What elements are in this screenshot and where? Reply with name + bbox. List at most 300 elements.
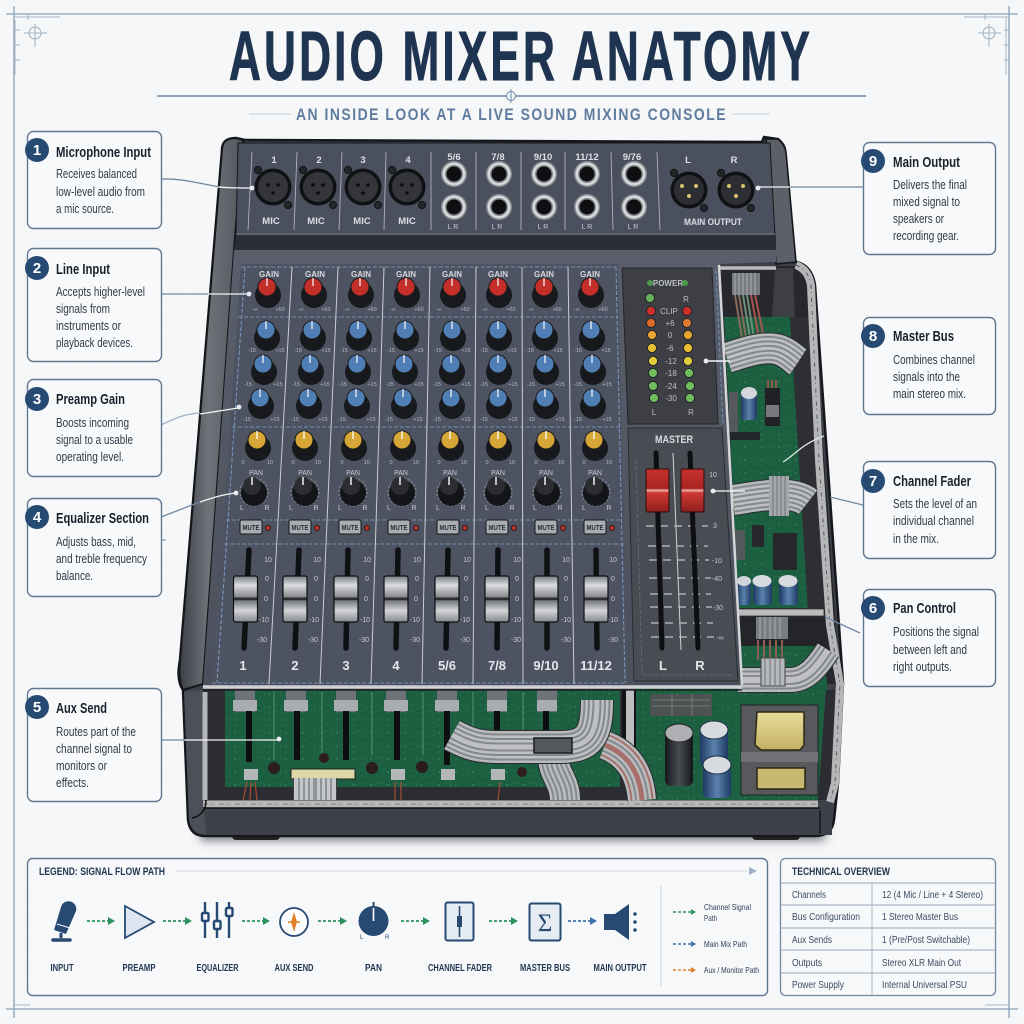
eq knobs: -15: [527, 417, 535, 423]
eq knobs: +15: [273, 382, 283, 388]
level meter panel: POWER: [653, 279, 683, 288]
callout 6: pan control: [861, 590, 996, 686]
level meter panel: -18: [665, 369, 677, 378]
pan knobs: L: [582, 505, 586, 512]
level meter panel: -30: [665, 394, 677, 403]
channel faders: 10: [313, 557, 321, 564]
aux knobs: 10: [606, 460, 612, 466]
eq knobs: +15: [366, 417, 376, 423]
gain row: GAIN: [305, 270, 325, 279]
channel faders: -10: [410, 617, 420, 624]
eq knobs: +15: [318, 417, 328, 423]
eq knobs: -15: [574, 417, 582, 423]
pan knobs: L: [289, 505, 293, 512]
channel faders: 10: [609, 557, 617, 564]
callout 2: line input: Accepts higher-level: [56, 285, 145, 299]
channel faders: -30: [511, 637, 521, 644]
aux knobs: 10: [558, 460, 564, 466]
callout 1: microphone input: Receives balanced: [56, 167, 137, 181]
channel faders: -30: [561, 637, 571, 644]
eq knobs: +15: [413, 417, 423, 423]
channel faders: 7/8: [488, 658, 506, 673]
eq knobs: +15: [601, 348, 611, 354]
pan knobs: R: [313, 505, 319, 512]
gain row: -∞: [390, 307, 396, 313]
panel: technical overview: Aux Sends: [792, 934, 832, 946]
flow stage labels: EQUALIZER: [196, 962, 239, 974]
pan knobs: R: [264, 505, 270, 512]
icon: master bus sigma: Σ: [538, 910, 552, 937]
pan knobs: R: [606, 505, 612, 512]
open case: lower bay: [184, 688, 835, 835]
callout 6: pan control: Positions the signal: [893, 625, 979, 639]
channel faders: 0: [464, 576, 468, 583]
lower faders and sliders on board: [233, 690, 560, 800]
callout 7: channel fader: Sets the level of an: [893, 497, 977, 511]
rear connector panel: MAIN OUTPUT: [684, 217, 742, 228]
flow stage labels: MAIN OUTPUT: [594, 962, 647, 974]
panel: technical overview: [780, 858, 996, 996]
eq knobs: +15: [602, 417, 612, 423]
channel faders: -30: [359, 637, 369, 644]
callout 9: main output: Delivers the final: [893, 178, 967, 192]
channel faders: -30: [410, 637, 420, 644]
eq knobs: -15: [433, 382, 441, 388]
channel faders: 0: [515, 576, 519, 583]
gain row: -∞: [528, 307, 534, 313]
channel faders: 0: [265, 576, 269, 583]
aux knobs: 10: [364, 460, 370, 466]
channel faders: -30: [608, 637, 618, 644]
rear connector panel: L: [685, 155, 691, 166]
channel faders: 0: [464, 596, 468, 603]
master section: MASTER: [655, 434, 693, 446]
eq knobs: -15: [340, 348, 348, 354]
channel faders: 11/12: [580, 658, 612, 673]
callout 4: equalizer section: and treble frequency: [56, 552, 148, 566]
eq knobs: -15: [480, 417, 488, 423]
callout 7: channel fader: [861, 462, 996, 558]
channel faders: -10: [360, 617, 370, 624]
channel faders: 0: [564, 576, 568, 583]
pan knobs: PAN: [491, 470, 505, 477]
master section: -40: [712, 576, 722, 583]
callout 4: equalizer section: Equalizer Section: [56, 510, 149, 527]
channel faders: 0: [564, 596, 568, 603]
panel: technical overview: Outputs: [792, 957, 822, 969]
callout 9: main output: mixed signal to: [893, 195, 960, 209]
ribbon cables lower: [315, 700, 642, 800]
rear connector panel: 7/8: [491, 152, 505, 163]
gain row: -∞: [298, 307, 304, 313]
icon: aux send: [280, 908, 308, 936]
channel faders: 10: [513, 557, 521, 564]
callout 8: master bus: [861, 318, 996, 414]
level meter panel: +6: [665, 319, 675, 328]
aux knobs: 0: [582, 460, 586, 466]
callout 5: aux send: [25, 688, 162, 802]
level meter panel: L: [652, 408, 657, 417]
eq knobs: +15: [461, 348, 471, 354]
rear connector panel: 9/10: [534, 152, 552, 163]
icon: preamp triangle: [125, 906, 154, 938]
eq knobs: [243, 321, 612, 423]
rear connector panel: 5/6: [447, 152, 461, 163]
panel: technical overview: 12 (4 Mic / Line + 4 Stereo): [882, 889, 983, 901]
pan knobs: R: [460, 505, 466, 512]
gain row: -∞: [344, 307, 350, 313]
gain row: +60: [552, 307, 562, 313]
callout 7: channel fader: individual channel: [893, 514, 974, 528]
eq knobs: +15: [321, 348, 331, 354]
pan knobs: PAN: [249, 470, 263, 477]
aux knobs: 0: [437, 460, 441, 466]
aux knobs: 0: [485, 460, 489, 466]
pan knobs: R: [362, 505, 368, 512]
channel faders: 0: [414, 596, 418, 603]
callout 1: microphone input: [25, 132, 162, 228]
eq knobs: -15: [574, 382, 582, 388]
callout 6: pan control: Pan Control: [893, 600, 956, 617]
panel: technical overview: Bus Configuration: [792, 911, 860, 923]
channel faders: -10: [561, 617, 571, 624]
callout 3: preamp gain: 3: [33, 391, 41, 408]
callout 1: microphone input: a mic source.: [56, 202, 114, 216]
master section: L: [659, 658, 667, 673]
mute buttons: MUTE: [342, 523, 358, 532]
callout 2: line input: Line Input: [56, 261, 110, 278]
rear connector panel: R: [731, 155, 738, 166]
mute buttons: MUTE: [538, 523, 554, 532]
channel faders: 4: [392, 658, 400, 673]
channel faders: -30: [257, 637, 267, 644]
channel faders: 0: [264, 596, 268, 603]
eq knobs: +15: [461, 417, 471, 423]
subtitle: AN INSIDE LOOK AT A LIVE SOUND MIXING CONSOLE: [296, 106, 727, 124]
gain row: [252, 270, 608, 313]
callout 5: aux send: monitors or: [56, 759, 107, 773]
icon: microphone: [53, 901, 76, 940]
rear connector panel: L R: [448, 224, 458, 231]
gain row: GAIN: [534, 270, 554, 279]
open case: upper bay: [718, 265, 840, 802]
channel faders: [234, 550, 618, 673]
path key: Aux / Monitor Path: [704, 965, 759, 975]
rear connector panel: MIC: [307, 216, 325, 227]
level meter panel: CLIP: [660, 307, 678, 316]
pan knobs: L: [240, 505, 244, 512]
channel faders: 0: [515, 596, 519, 603]
callout 5: aux send: effects.: [56, 776, 89, 790]
eq knobs: +15: [553, 348, 563, 354]
channel faders: 10: [562, 557, 570, 564]
icon: equalizer: [202, 902, 232, 938]
callout 1: microphone input: Microphone Input: [56, 144, 151, 161]
icon: master bus sigma: [530, 904, 560, 940]
pan knobs: PAN: [539, 470, 553, 477]
master section: R: [695, 658, 705, 673]
callout 7: channel fader: Channel Fader: [893, 473, 971, 490]
master section: [628, 428, 738, 681]
callout 8: master bus: signals into the: [893, 370, 960, 384]
gain row: -∞: [574, 307, 580, 313]
callout 5: aux send: channel signal to: [56, 742, 132, 756]
rear connector panel: MIC: [398, 216, 416, 227]
mixer illustration: [179, 137, 843, 840]
icon: pan knob: [358, 902, 390, 941]
gain row: -∞: [252, 307, 258, 313]
callout 3: preamp gain: Boosts incoming: [56, 416, 129, 430]
pan knobs: L: [338, 505, 342, 512]
flow stage labels: PAN: [365, 962, 382, 974]
eq knobs: +15: [414, 382, 424, 388]
eq knobs: -15: [433, 417, 441, 423]
channel faders: -30: [460, 637, 470, 644]
pan knobs: L: [533, 505, 537, 512]
master section: -∞: [716, 635, 724, 642]
gain row: -∞: [436, 307, 442, 313]
eq knobs: +15: [555, 382, 565, 388]
callout 9: main output: Main Output: [893, 154, 960, 171]
callout 2: line input: [25, 248, 162, 362]
callout 4: equalizer section: balance.: [56, 569, 93, 583]
level meter panel: [622, 268, 723, 424]
channel faders: 10: [463, 557, 471, 564]
panel: legend signal flow path: LEGEND: SIGNAL FLOW PATH: [39, 866, 165, 878]
callout 5: aux send: Routes part of the: [56, 725, 136, 739]
flow stage labels: INPUT: [50, 962, 74, 974]
callout 3: preamp gain: operating level.: [56, 450, 124, 464]
channel faders: 0: [415, 576, 419, 583]
callout 9: main output: speakers or: [893, 212, 944, 226]
level meter panel: -6: [666, 344, 674, 353]
master section: -10: [712, 558, 722, 565]
gain row: GAIN: [351, 270, 371, 279]
rear connector panel: L R: [628, 224, 638, 231]
rear connector panel: 4: [405, 155, 411, 166]
channel faders: -10: [608, 617, 618, 624]
aux knobs: 0: [389, 460, 393, 466]
flow stage labels: CHANNEL FADER: [428, 962, 492, 974]
rear connector panel: 9/76: [623, 152, 641, 163]
rear connector panel: L R: [492, 224, 502, 231]
mute buttons: MUTE: [292, 523, 308, 532]
eq knobs: -15: [292, 382, 300, 388]
eq knobs: +15: [508, 417, 518, 423]
pan knobs: PAN: [588, 470, 602, 477]
mute buttons: MUTE: [586, 523, 604, 532]
callout 2: line input: 2: [33, 260, 41, 277]
pan knobs: [240, 470, 612, 512]
channel faders: 0: [611, 576, 615, 583]
pan knobs: R: [411, 505, 417, 512]
callout 7: channel fader: 7: [869, 473, 877, 490]
callout 6: pan control: between left and: [893, 643, 967, 657]
eq knobs: -15: [339, 382, 347, 388]
control surface: [203, 250, 776, 690]
channel faders: -10: [511, 617, 521, 624]
aux knobs: [241, 431, 612, 466]
master section: 3: [713, 523, 717, 530]
gain row: GAIN: [488, 270, 508, 279]
eq knobs: -15: [244, 382, 252, 388]
eq knobs: -15: [480, 382, 488, 388]
side rails: [179, 138, 796, 690]
rear connector panel: 3: [360, 155, 366, 166]
master section: 10: [709, 472, 717, 479]
aux knobs: 10: [315, 460, 321, 466]
flow stage labels: PREAMP: [122, 962, 156, 974]
gain row: +60: [598, 307, 608, 313]
icon: speaker: [604, 904, 637, 940]
gain row: +60: [414, 307, 424, 313]
level meter panel: R: [683, 295, 689, 304]
pan knobs: L: [387, 505, 391, 512]
icon: pan knob: R: [385, 935, 390, 941]
eq knobs: +15: [414, 348, 424, 354]
eq knobs: +15: [367, 348, 377, 354]
callout 8: master bus: Combines channel: [893, 353, 975, 367]
eq knobs: +15: [461, 382, 471, 388]
pan knobs: L: [436, 505, 440, 512]
callout 2: line input: playback devices.: [56, 336, 133, 350]
callout 9: main output: recording gear.: [893, 229, 959, 243]
pan knobs: PAN: [346, 470, 360, 477]
rear connector panel: 1: [271, 155, 277, 166]
callout 8: master bus: Master Bus: [893, 328, 954, 345]
eq knobs: +15: [508, 382, 518, 388]
path key: Channel Signal: [704, 902, 751, 912]
gain row: GAIN: [580, 270, 600, 279]
aux knobs: 10: [509, 460, 515, 466]
rear connector panel: [234, 143, 776, 250]
aux knobs: 0: [534, 460, 538, 466]
eq knobs: -15: [526, 348, 534, 354]
callout 6: pan control: 6: [869, 600, 877, 617]
eq knobs: -15: [527, 382, 535, 388]
callout 7: channel fader: in the mix.: [893, 532, 939, 546]
channel faders: 0: [364, 596, 368, 603]
callout 5: aux send: 5: [33, 699, 41, 716]
mute buttons: MUTE: [390, 523, 408, 532]
channel faders: 0: [611, 596, 615, 603]
callout 1: microphone input: low-level audio from: [56, 185, 145, 199]
callout 4: equalizer section: 4: [33, 509, 42, 526]
panel: technical overview: Stereo XLR Main Out: [882, 957, 961, 969]
callout 9: main output: 9: [869, 153, 877, 170]
rear connector panel: MIC: [353, 216, 371, 227]
panel: technical overview: TECHNICAL OVERVIEW: [792, 866, 890, 878]
callout 6: pan control: right outputs.: [893, 660, 952, 674]
callout 2: line input: signals from: [56, 302, 110, 316]
eq knobs: -15: [574, 348, 582, 354]
eq knobs: -15: [248, 348, 256, 354]
gain row: -∞: [482, 307, 488, 313]
panel: technical overview: 1 (Pre/Post Switchable): [882, 934, 970, 946]
capacitors and transformer: [650, 694, 818, 798]
level meter panel: -12: [665, 357, 677, 366]
channel faders: 9/10: [533, 658, 559, 673]
aux knobs: 10: [413, 460, 419, 466]
callout 5: aux send: Aux Send: [56, 700, 107, 717]
pan knobs: L: [485, 505, 489, 512]
channel faders: 3: [342, 658, 350, 673]
channel faders: 5/6: [438, 658, 456, 673]
level meter panel: -24: [665, 382, 677, 391]
aux knobs: 10: [461, 460, 467, 466]
flow stage labels: MASTER BUS: [520, 962, 570, 974]
aux knobs: 0: [241, 460, 245, 466]
eq knobs: +15: [507, 348, 517, 354]
gain row: +60: [321, 307, 331, 313]
callout 4: equalizer section: Adjusts bass, mid,: [56, 535, 136, 549]
eq knobs: +15: [320, 382, 330, 388]
path key: Path: [704, 913, 717, 923]
callout 8: master bus: main stereo mix.: [893, 387, 966, 401]
channel faders: -10: [259, 617, 269, 624]
leader lines: [161, 179, 863, 741]
level meter panel: 0: [668, 331, 673, 340]
callout 3: preamp gain: [25, 380, 162, 476]
flow stage labels: AUX SEND: [274, 962, 314, 974]
channel faders: 0: [365, 576, 369, 583]
callout 3: preamp gain: Preamp Gain: [56, 391, 125, 408]
eq knobs: -15: [294, 348, 302, 354]
aux knobs: 0: [340, 460, 344, 466]
mute buttons: [240, 520, 615, 534]
level meter panel: R: [688, 408, 694, 417]
eq knobs: +15: [270, 417, 280, 423]
gain row: +60: [506, 307, 516, 313]
rear connector panel: L R: [538, 224, 548, 231]
mute buttons: MUTE: [440, 523, 456, 532]
pan knobs: PAN: [394, 470, 408, 477]
mute buttons: MUTE: [488, 523, 506, 532]
channel faders: -10: [460, 617, 470, 624]
flow stage labels: [50, 962, 647, 974]
panel: technical overview: Power Supply: [792, 979, 845, 991]
panel: technical overview: Channels: [792, 889, 826, 901]
panel: technical overview: Internal Universal PSU: [882, 979, 967, 991]
gain row: +60: [275, 307, 285, 313]
eq knobs: -15: [385, 417, 393, 423]
pan knobs: R: [557, 505, 563, 512]
panel: technical overview: 1 Stereo Master Bus: [882, 911, 958, 923]
gain row: GAIN: [442, 270, 462, 279]
gain row: GAIN: [259, 270, 279, 279]
callout 9: main output: [861, 142, 996, 254]
pan knobs: PAN: [443, 470, 457, 477]
pan knobs: R: [509, 505, 515, 512]
channel faders: 0: [314, 596, 318, 603]
eq knobs: -15: [338, 417, 346, 423]
gain row: +60: [367, 307, 377, 313]
channel faders: 10: [413, 557, 421, 564]
eq knobs: -15: [386, 382, 394, 388]
icon: pan knob: L: [360, 935, 364, 941]
aux knobs: 10: [267, 460, 273, 466]
eq knobs: -15: [243, 417, 251, 423]
rear connector panel: 11/12: [575, 152, 599, 163]
path key: Main Mix Path: [704, 939, 747, 949]
channel faders: 2: [291, 658, 299, 673]
icon: channel fader: [446, 902, 474, 940]
channel faders: 10: [264, 557, 272, 564]
rear connector panel: 2: [316, 155, 322, 166]
eq knobs: -15: [480, 348, 488, 354]
eq knobs: -15: [387, 348, 395, 354]
callout 2: line input: instruments or: [56, 319, 121, 333]
